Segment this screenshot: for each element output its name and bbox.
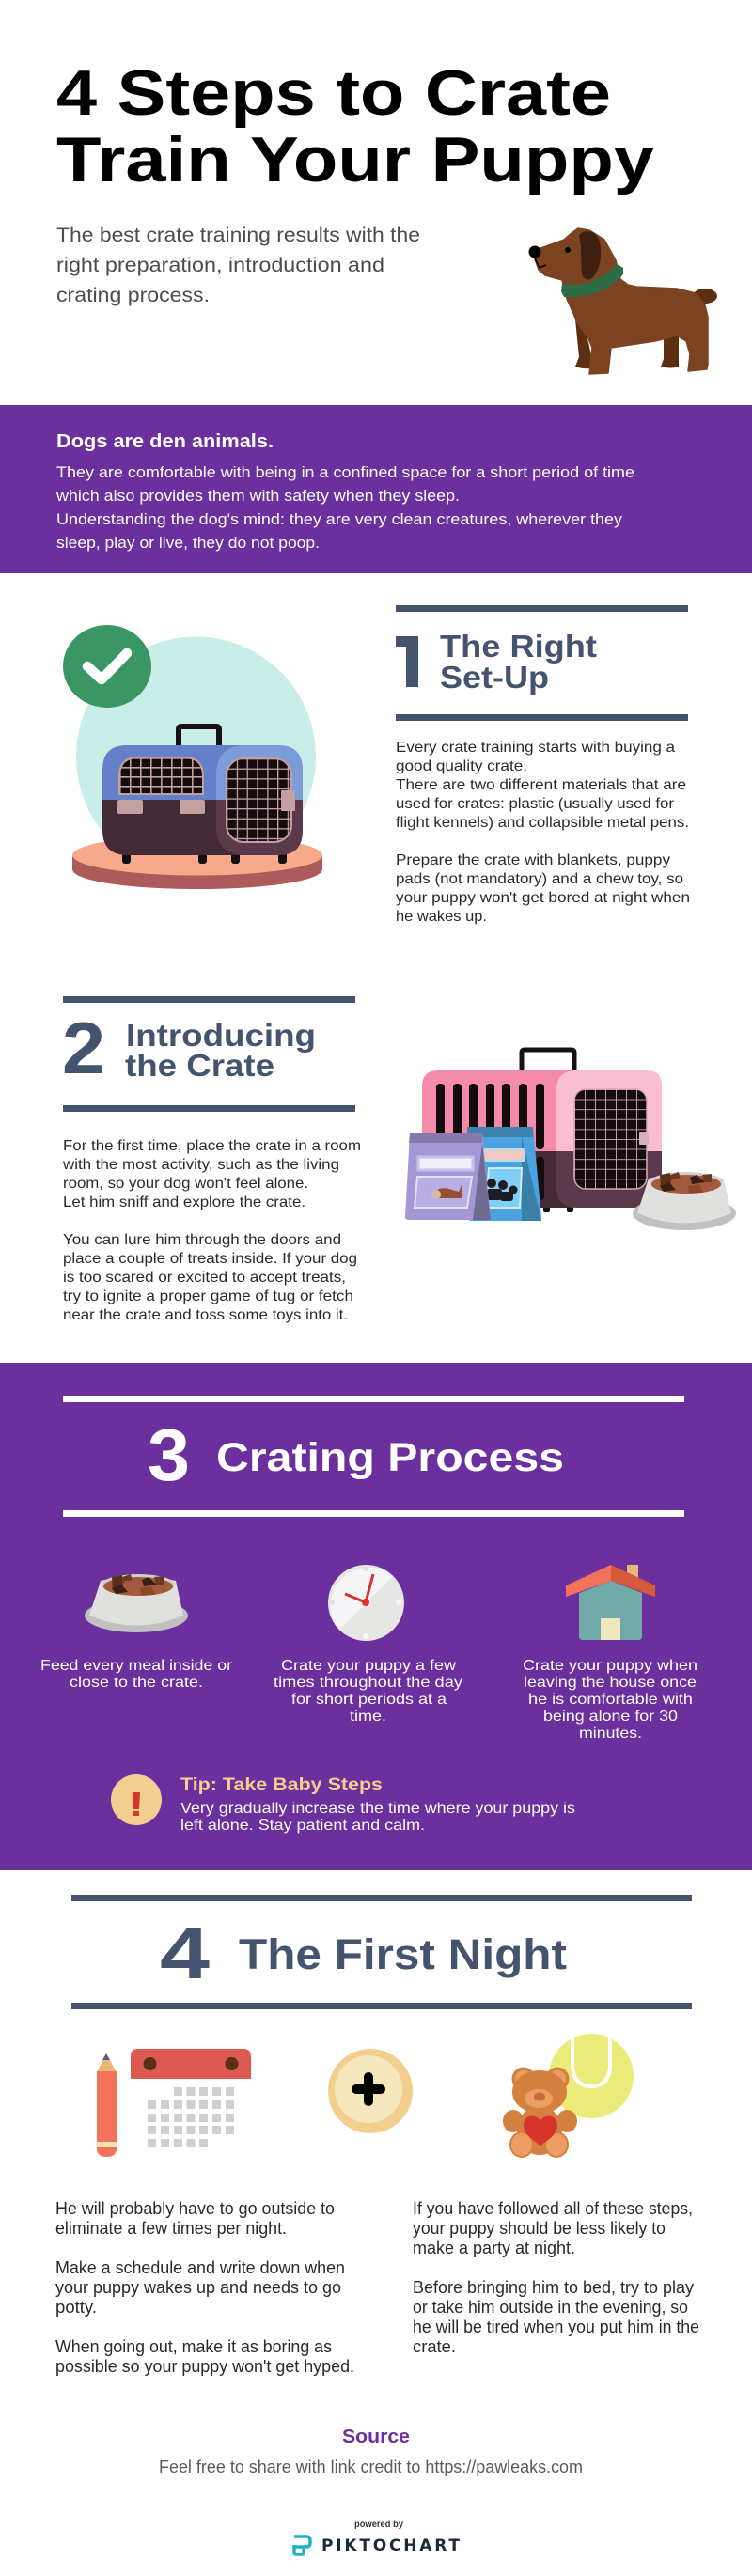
subtitle: The best crate training results with the [56, 225, 420, 246]
text: step 3 column 3: being alone for 30 [543, 1709, 678, 1725]
text: step 3 column 3: he is comfortable with [528, 1692, 693, 1708]
text: step 4 left column: Make a schedule and write down when [55, 2258, 345, 2277]
text: step 1 body: Prepare the crate with blankets, puppy [396, 852, 670, 868]
icon: dog [528, 228, 717, 374]
text: step 3 column 1: close to the crate. [70, 1675, 203, 1691]
subtitle [56, 225, 420, 306]
text: step 3 column 3: minutes. [579, 1725, 642, 1741]
panel: dogs are den animals: which also provides them with safety when they sleep. [55, 487, 460, 505]
subtitle: right preparation, introduction and [56, 255, 384, 276]
icon: food bowl [85, 1574, 188, 1632]
title: Train Your Puppy [56, 124, 654, 195]
text: step 4 right column: Before bringing him to bed, try to play [413, 2278, 694, 2297]
text: step 2 body: try to ignite a proper game of tug or fetch [63, 1288, 353, 1304]
text: step 3 column 2: for short periods at a [291, 1692, 446, 1708]
text: step 4 left column: He will probably have to go outside to [55, 2199, 335, 2218]
text: step 4 right column: or take him outside in the evening, so [413, 2298, 688, 2317]
piktochart logo: powered by [354, 2520, 403, 2530]
text: step 2 body: For the first time, place the crate in a room [63, 1138, 361, 1154]
callout: tip [180, 1775, 575, 1834]
text: step 4 right column: If you have followed all of these steps, [413, 2199, 693, 2218]
text: step 4 right column: crate. [413, 2337, 456, 2356]
text: step 2 body: near the crate and toss some toys into it. [63, 1307, 348, 1323]
icon: pencil [97, 2053, 117, 2157]
icon: tennis ball and teddy bear [503, 2034, 634, 2158]
text: step 3 column 3: Crate your puppy when [523, 1658, 697, 1674]
piktochart logo [294, 2520, 460, 2555]
text: step 2 body: is too scared or excited to accept treats, [63, 1270, 346, 1286]
icon: blue crate on platform with check badge [63, 625, 322, 889]
text: step 4 right column [413, 2199, 699, 2356]
icon: plus [328, 2049, 413, 2133]
text: step 2 body: with the most activity, such as the living [62, 1157, 339, 1173]
text: step 1 body: your puppy won't get bored at night when [396, 890, 690, 906]
heading: step 4: 4 [160, 1912, 210, 1994]
panel: dogs are den animals: Dogs are den animals. [56, 431, 274, 452]
text: step 3 column 1: Feed every meal inside or [40, 1658, 233, 1674]
text: step 3 column 2 [274, 1658, 462, 1725]
heading: step 3: 3 [148, 1413, 190, 1496]
text: step 2 body: Let him sniff and explore the crate. [63, 1194, 306, 1210]
text: step 2 body: room, so your dog won't feel alone. [63, 1176, 308, 1192]
panel: step 3 crating process [0, 1363, 752, 1870]
text: step 4 left column: potty. [55, 2298, 97, 2317]
icon: pink crate with food bags and bowl [405, 1050, 736, 1230]
text: step 4 left column: your puppy wakes up and needs to go [55, 2278, 341, 2297]
text: step 1 body: he wakes up. [396, 909, 487, 925]
source: Feel free to share with link credit to https://pawleaks.com [159, 2458, 583, 2476]
heading: step 2: 2 [62, 1007, 105, 1089]
text: step 3 column 3 [523, 1658, 697, 1741]
heading: step 4 [71, 1895, 692, 2009]
text: step 4 right column: he will be tired when you put him in the [413, 2318, 699, 2336]
text: step 4 left column: When going out, make it as boring as [55, 2337, 332, 2356]
text: step 4 right column: your puppy should be less likely to [413, 2219, 666, 2238]
text: step 3 column 3: leaving the house once [524, 1675, 697, 1691]
source: Source [342, 2427, 410, 2447]
heading: step 2 [62, 996, 355, 1112]
icon: tip exclamation [111, 1774, 162, 1825]
text: step 1 body: pads (not mandatory) and a chew toy, so [396, 871, 683, 887]
text: step 1 body: good quality crate. [396, 758, 527, 774]
text: step 2 body: place a couple of treats inside. If your dog [63, 1251, 357, 1267]
heading: step 4: The First Night [239, 1930, 567, 1978]
text: step 4 left column: possible so your puppy won't get hyped. [55, 2357, 354, 2376]
icon: house [566, 1565, 655, 1640]
text: step 1 body: There are two different materials that are [396, 777, 686, 793]
heading: step 2: Introducing [126, 1018, 316, 1053]
text: step 4 right column: make a party at night. [413, 2239, 575, 2257]
title: 4 Steps to Crate [56, 57, 611, 129]
panel: dogs are den animals: Understanding the dog's mind: they are very clean creatures, wherever they [56, 510, 623, 528]
callout: tip: Tip: Take Baby Steps [180, 1775, 383, 1795]
text: step 1 body: used for crates: plastic (usually used for [396, 796, 675, 812]
text: step 3 column 2: Crate your puppy a few [281, 1658, 457, 1674]
icon: calendar [131, 2049, 251, 2147]
title [56, 57, 654, 195]
text: step 2 body: You can lure him through the doors and [63, 1232, 341, 1248]
panel: dogs are den animals: They are comfortable with being in a confined space for a short period of time [56, 463, 634, 481]
callout: tip: Very gradually increase the time where your puppy is [180, 1801, 575, 1817]
panel: dogs are den animals: sleep, play or live, they do not poop. [56, 534, 320, 552]
text: step 4 left column: eliminate a few times per night. [55, 2219, 287, 2238]
heading: step 1 [396, 605, 688, 721]
text: step 3 column 1 [40, 1658, 233, 1691]
heading: step 1: The Right [440, 629, 597, 664]
panel: dogs are den animals [0, 405, 752, 573]
text: step 1 body: flight kennels) and collapsible metal pens. [396, 815, 689, 831]
callout: tip: left alone. Stay patient and calm. [180, 1818, 425, 1834]
heading: step 1: Set-Up [440, 660, 549, 695]
heading: step 2: the Crate [125, 1048, 274, 1083]
piktochart logo: PIKTOCHART [321, 2537, 460, 2555]
heading: step 3: Crating Process [216, 1435, 564, 1480]
heading: step 3 [63, 1396, 684, 1517]
text: step 2 body [62, 1138, 361, 1323]
subtitle: crating process. [56, 285, 210, 306]
text: step 3 column 2: time. [350, 1709, 386, 1725]
text: step 4 left column [55, 2199, 354, 2376]
text: step 1 body: Every crate training starts with buying a [396, 740, 675, 756]
source [159, 2427, 583, 2476]
text: step 3 column 2: times throughout the day [274, 1675, 462, 1691]
text: step 1 body [396, 740, 690, 925]
icon: clock [328, 1565, 404, 1641]
